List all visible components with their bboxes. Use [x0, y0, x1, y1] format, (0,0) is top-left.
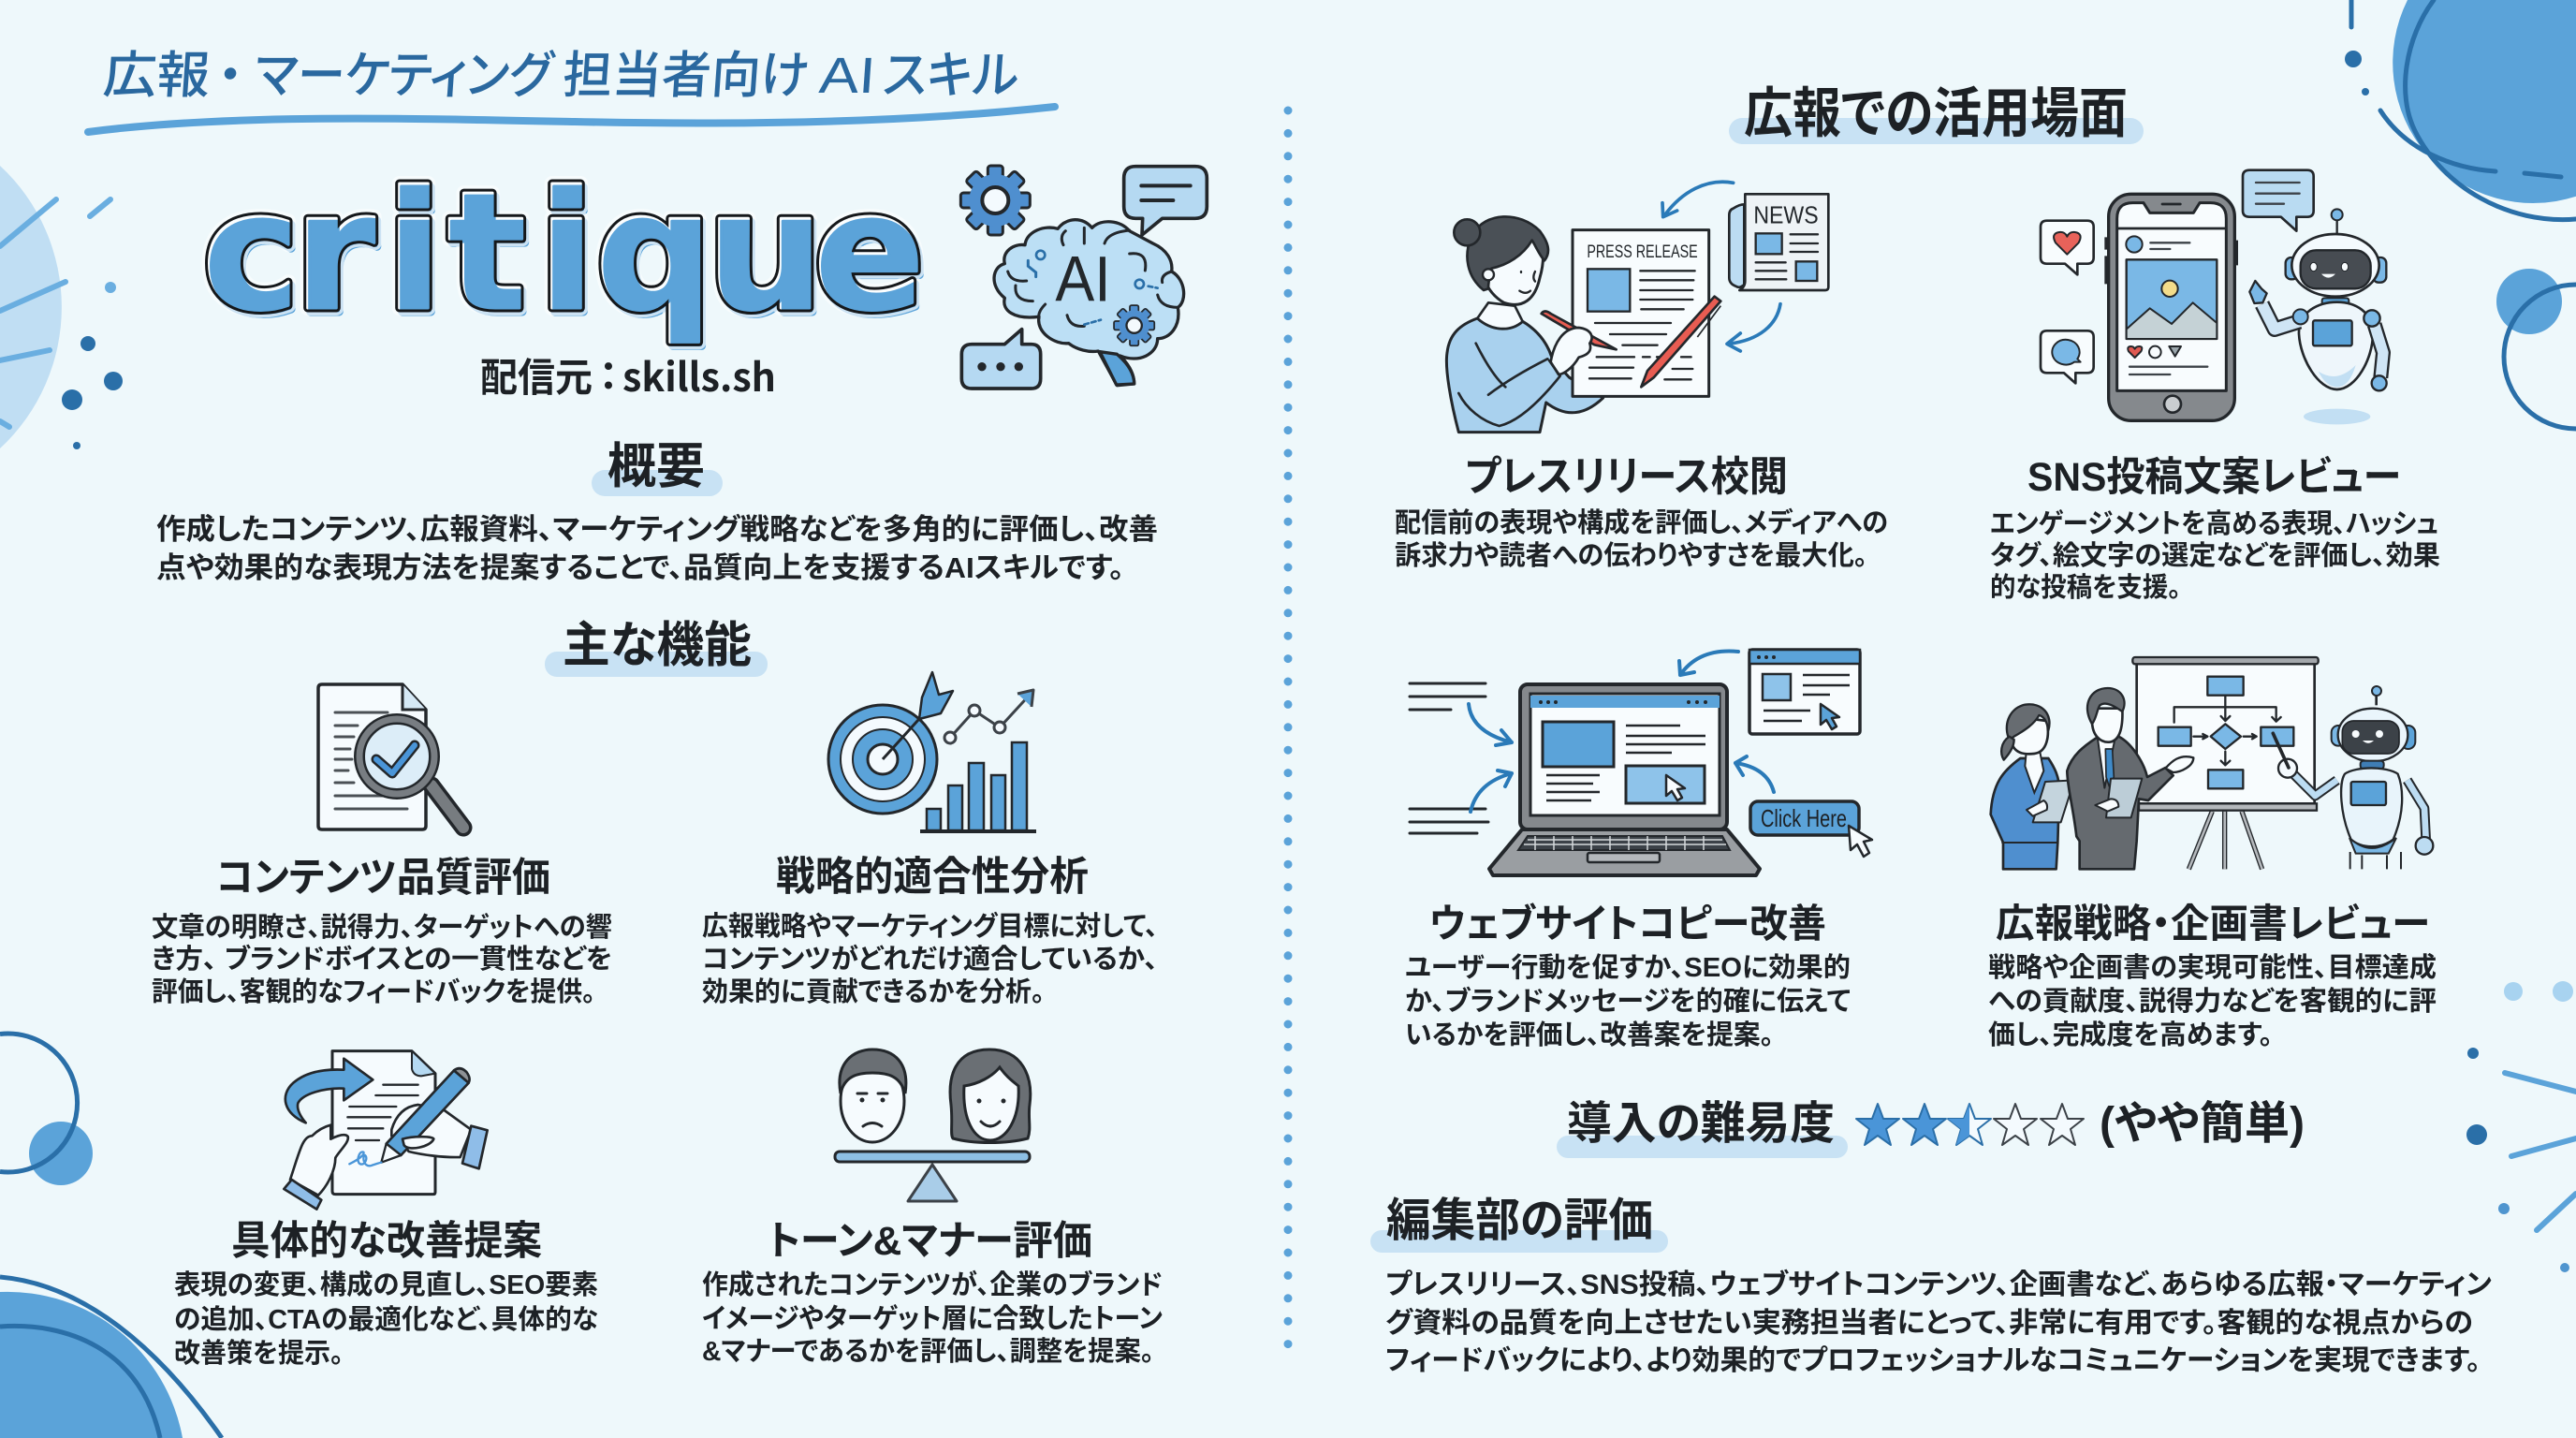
use case: press release: [1395, 182, 1888, 571]
feature text: [702, 1269, 1163, 1367]
use case heading: 広報戦略・企画書レビュー: [1996, 902, 2430, 946]
background decorations: right lower: [2466, 981, 2576, 1272]
feature heading: トーン&マナー評価: [768, 1219, 1092, 1264]
use case text: タグ、絵文字の選定などを評価し、効果: [1990, 540, 2440, 571]
kicker title: スキル: [881, 48, 1020, 104]
heading: use cases: 広報での活用場面: [1744, 83, 2128, 144]
feature text: [702, 911, 1158, 1007]
feature text: 効果的に貢献できるかを分析。: [702, 976, 1045, 1007]
source line: ：: [589, 345, 628, 403]
background decorations: left middle: [0, 1034, 93, 1185]
use case text: [1395, 506, 1888, 571]
icon: smartphone, bubbles and robot: [2041, 170, 2387, 424]
kicker title: マーケティング: [253, 48, 557, 104]
use case text: [1988, 952, 2437, 1050]
difficulty rating: [1557, 1099, 2305, 1158]
main title: critique: critique: [202, 157, 925, 347]
use case text: ユーザー行動を促すか、SEOに効果的: [1405, 952, 1851, 983]
feature text: の追加、CTAの最適化など、具体的な: [174, 1304, 598, 1335]
feature heading: 具体的な改善提案: [231, 1219, 542, 1264]
main title: critique: critique: [204, 160, 927, 350]
feature: content quality: [152, 684, 612, 1007]
source line: 配信元: [480, 346, 593, 404]
feature text: 文章の明瞭さ、説得力、ターゲットへの響: [152, 912, 612, 943]
feature text: 作成されたコンテンツが、企業のブランド: [702, 1269, 1163, 1300]
use case text: 配信前の表現や構成を評価し、メディアへの: [1395, 506, 1888, 538]
feature text: イメージやターゲット層に合致したトーン: [702, 1303, 1163, 1334]
kicker title: [101, 48, 1020, 104]
feature text: [152, 912, 612, 1007]
icon: AI brain: [960, 166, 1207, 389]
heading: editorial review: 編集部の評価: [1386, 1196, 1653, 1246]
feature heading: 戦略的適合性分析: [776, 855, 1089, 900]
use case heading: プレスリリース校閲: [1465, 454, 1788, 500]
icon: document with magnifier: [318, 684, 463, 829]
center dotted divider: [1284, 110, 1292, 1356]
icon: person proofreading press release: [1446, 182, 1828, 433]
editorial review text: プレスリリース、SNS投稿、ウェブサイトコンテンツ、企画書など、あらゆる広報・マーケティン: [1385, 1269, 2492, 1300]
feature text: 広報戦略やマーケティング目標に対して、: [702, 911, 1158, 942]
use case text: いるかを評価し、改善案を提案。: [1405, 1020, 1774, 1050]
overview text: 作成したコンテンツ、広報資料、マーケティング戦略などを多角的に評価し、改善: [156, 513, 1158, 546]
heading: main features: 主な機能: [563, 619, 752, 673]
source line: [480, 345, 776, 404]
use case text: 戦略や企画書の実現可能性、目標達成: [1988, 952, 2437, 983]
use case text: 訴求力や読者への伝わりやすさを最大化。: [1395, 540, 1867, 571]
editorial review text: グ資料の品質を向上させたい実務担当者にとって、非常に有用です。客観的な視点からの: [1385, 1308, 2473, 1339]
kicker title: 広報: [101, 48, 212, 104]
kicker title: AI: [817, 48, 877, 104]
editorial review text: [1385, 1269, 2492, 1376]
icon: laptop, browser window and click button: [1410, 650, 1872, 875]
icon: AI brain: AI: [1055, 244, 1111, 315]
icon: document, arrow, pen and hands: [284, 1051, 488, 1210]
feature text: き方、 ブランドボイスとの一貫性などを: [152, 943, 612, 975]
feature text: 表現の変更、構成の見直し、SEO要素: [174, 1269, 598, 1300]
feature text: コンテンツがどれだけ適合しているか、: [702, 943, 1158, 975]
use case: SNS: [1990, 170, 2440, 603]
feature text: &マナーであるかを評価し、調整を提案。: [702, 1336, 1154, 1367]
feature: tone and manner: [702, 1049, 1163, 1367]
feature text: 評価し、客観的なフィードバックを提供。: [152, 976, 595, 1007]
use case text: 価し、完成度を高めます。: [1988, 1020, 2273, 1050]
feature: concrete improvement: [174, 1051, 598, 1369]
icon: person proofreading press release: NEWS: [1753, 200, 1819, 228]
use case: strategy and plan review: [1988, 657, 2437, 1050]
icon: laptop, browser window and click button: Click Here: [1761, 804, 1847, 832]
difficulty rating: (やや簡単): [2100, 1099, 2305, 1149]
use case text: [1405, 952, 1851, 1050]
icon: people and robot presenting flowchart: [1991, 657, 2433, 869]
use case text: への貢献度、説得力などを客観的に評: [1988, 986, 2437, 1017]
heading: overview: 概要: [607, 440, 705, 494]
background decorations: top right: [2345, 0, 2576, 220]
icon: target and chart: [828, 672, 1036, 831]
main title: critique: critique: [202, 157, 925, 347]
overview text: 点や効果的な表現方法を提案することで、品質向上を支援するAIスキルです。: [156, 551, 1124, 584]
kicker title: ・: [215, 48, 244, 104]
background decorations: right middle: [2496, 269, 2576, 429]
icon: person proofreading press release: PRESS RELEASE: [1587, 242, 1698, 262]
editorial review text: フィードバックにより、より効果的でプロフェッショナルなコミュニケーションを実現できます。: [1385, 1345, 2481, 1376]
source line: skills.sh: [622, 346, 776, 404]
use case heading: ウェブサイトコピー改善: [1429, 902, 1826, 946]
use case text: 的な投稿を支援。: [1990, 572, 2181, 603]
use case text: か、ブランドメッセージを的確に伝えて: [1405, 985, 1851, 1017]
feature heading: コンテンツ品質評価: [216, 856, 550, 901]
overview text: [156, 513, 1158, 584]
use case text: エンゲージメントを高める表現、ハッシュ: [1990, 508, 2438, 539]
speech bubble top: [1124, 167, 1207, 235]
use case heading: SNS投稿文案レビュー: [2027, 455, 2401, 500]
feature: strategic fit: [702, 672, 1158, 1007]
feature text: [174, 1269, 598, 1369]
use case: website copy: [1405, 650, 1872, 1050]
kicker underline: [88, 107, 1055, 132]
background decorations: left top: [0, 166, 123, 449]
background decorations: left bottom: [0, 1277, 222, 1438]
use case text: [1990, 508, 2440, 603]
difficulty rating: 導入の難易度: [1567, 1099, 1835, 1149]
icon: two faces on a balance: [835, 1049, 1031, 1201]
main title: critique: critique: [205, 161, 928, 351]
feature text: 改善策を提示。: [174, 1338, 344, 1369]
speech bubble bottom: [961, 330, 1041, 389]
brain outline: [994, 220, 1184, 386]
icon: stars 2.5 of 5: [1856, 1104, 2084, 1145]
kicker title: 担当者向け: [561, 48, 811, 104]
